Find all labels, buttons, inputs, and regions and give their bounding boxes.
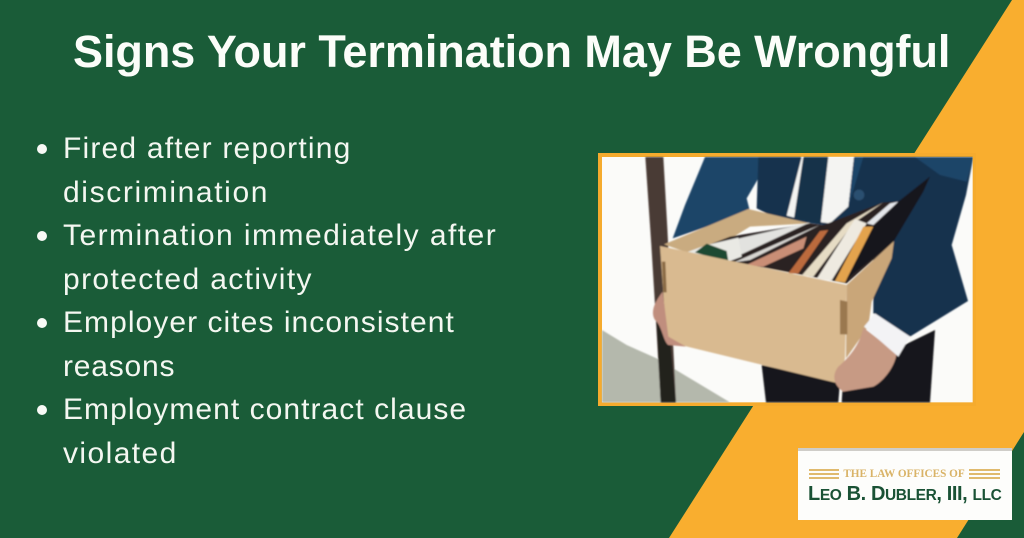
bullet list of termination signs: Fired after reporting (63, 132, 351, 165)
bullet list of termination signs (37, 132, 497, 470)
bullet list of termination signs: discrimination (63, 176, 269, 208)
logo firm name: LEO B. DUBLER, III, LLC (808, 483, 1001, 505)
bullet list of termination signs: Employer cites inconsistent (63, 306, 455, 339)
logo decorative lines right (969, 469, 1000, 479)
bullet list of termination signs: reasons (63, 350, 175, 382)
bullet list of termination signs: Termination immediately after (63, 219, 497, 252)
logo firm tagline: THE LAW OFFICES OF (843, 468, 965, 480)
title: Signs Your Termination May Be Wrongful (73, 26, 950, 77)
bullet list of termination signs: Employment contract clause (63, 393, 467, 426)
logo decorative lines left (809, 469, 839, 479)
bullet list of termination signs: violated (63, 436, 178, 470)
logo: The Law Offices of Leo B. Dubler, III, LLC (798, 448, 1012, 520)
photo: person carrying a cardboard box of office items (598, 153, 973, 406)
bullet list of termination signs: protected activity (63, 262, 313, 296)
